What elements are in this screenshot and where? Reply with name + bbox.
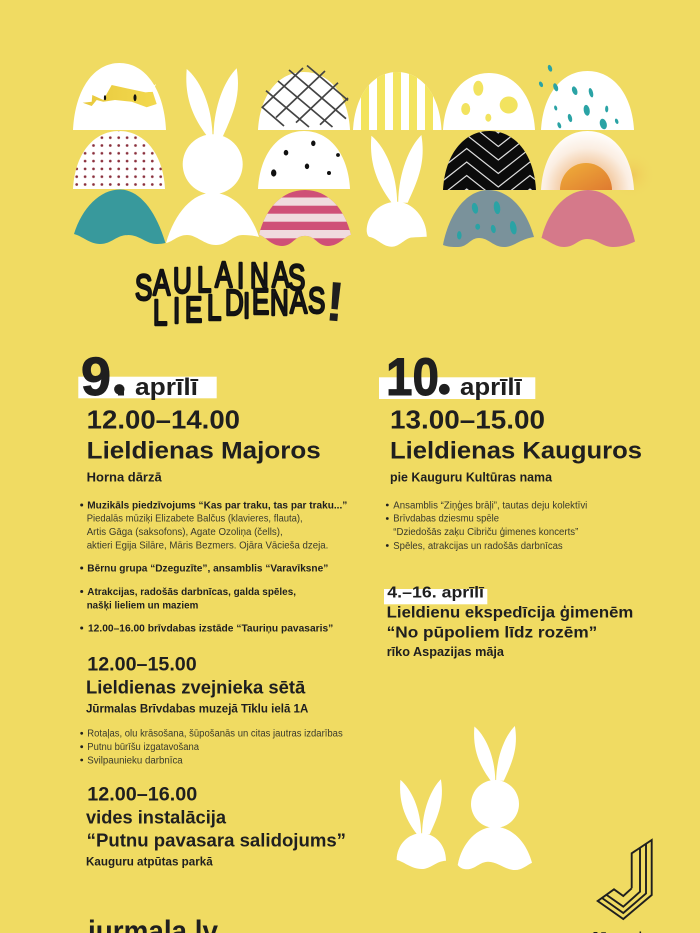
bunny: ears and body [367,135,427,247]
date heading 9. aprīlī [78,347,217,407]
event: Lieldienas zvejnieka sētā: Lieldienas zvejnieka sētā [86,676,306,697]
event: Lieldienas Majoros: 12.00–14.00 [87,406,240,434]
list: Kauguri programme: Spēles, atrakcijas un radošās darbnīcas [393,541,563,552]
egg: teal speckles [538,64,634,130]
event: Putnu pavasara salidojums: Kauguru atpūtas parkā [86,857,213,869]
egg: vertical stripes [353,72,442,130]
event: Lieldienas zvejnieka sētā: 12.00–15.00 [87,654,197,676]
list: zvejnieka sēta programme: Putnu būrīšu izgatavošana [87,742,199,753]
event: Putnu pavasara salidojums: vides instalācija [86,806,227,827]
event: Putnu pavasara salidojums: “Putnu pavasara salidojums” [87,830,346,851]
title: Saulainas Lieldienas [135,255,347,334]
list: zvejnieka sēta programme: Rotaļas, olu krāsošana, šūpošanās un citas jautras izdarības [87,729,343,740]
event: Lieldienu ekspedīcija: 4.–16. aprīlī [387,584,485,601]
infographic poster [73,63,653,933]
egg: black dots [258,131,350,189]
date heading 10. aprīlī: aprīlī [460,374,522,401]
event: Lieldienas Majoros [87,406,321,485]
list: Majoros programme: Artis Gāga (saksofons), Agate Ozoliņa (čells), [87,526,283,538]
event: Lieldienu ekspedīcija [384,584,633,659]
event: Lieldienas Kauguros [390,406,642,485]
list: Majoros programme: aktieri Egija Silāre, Māris Bezmers. Ojāra Vācieša dzeja. [87,539,328,551]
egg: hatching chick [73,63,166,130]
egg: solid pink [542,190,635,247]
column: 9 April [78,347,347,869]
illustration: big bunny [458,726,532,870]
list: Majoros programme: Bērnu grupa “Dzeguzīte”, ansamblis “Varavīksne” [87,563,328,575]
event: Lieldienu ekspedīcija: “No pūpoliem līdz rozēm” [387,625,597,642]
list: Majoros programme: Muzikāls piedzīvojums “Kas par traku, tas par traku...” [87,499,347,511]
event: Lieldienas Majoros: Horna dārzā [87,471,163,485]
date heading 10. aprīlī [379,348,535,407]
event: Putnu pavasara salidojums [86,784,346,869]
list: Majoros programme: 12.00–16.00 brīvdabas izstāde “Tauriņu pavasaris” [88,623,333,635]
logo: Jūrmala J mark [590,840,653,933]
event: Lieldienas Kauguros: 13.00–15.00 [390,406,545,434]
egg: brown polka dots [70,130,168,190]
list: Majoros programme: Atrakcijas, radošās darbnīcas, galda spēles, [87,586,296,598]
event: Lieldienas zvejnieka sētā [86,654,308,715]
event: Lieldienas Kauguros: Lieldienas Kauguros [390,437,642,464]
title: Saulainas Lieldienas: SAULAINAS [135,255,305,308]
list: Majoros programme: našķi lieliem un maziem [87,599,198,611]
list: Majoros programme: Piedalās mūziķi Elizabete Balčus (klavieres, flauta), [87,513,303,525]
list: Kauguri programme: “Dziedošās zaķu Cibriču ģimenes koncerts” [393,525,578,538]
event: Lieldienas zvejnieka sētā: Jūrmalas Brīvdabas muzejā Tīklu ielā 1A [86,703,308,715]
title: Saulainas Lieldienas: ! [323,269,347,334]
event: Lieldienas Kauguros: pie Kauguru Kultūras nama [390,471,553,485]
egg: sunrise [541,131,656,199]
illustration: eggs and bunnies grid [70,60,656,250]
column: 10 April [379,348,642,659]
event: Lieldienu ekspedīcija: rīko Aspazijas māja [387,644,505,659]
egg: yellow spots [443,73,535,130]
list: Kauguri programme: Brīvdabas dziesmu spēle [393,514,499,525]
title: Saulainas Lieldienas: LIELDIENAS [153,281,325,333]
egg: lattice [258,66,350,130]
list: Kauguri programme: Ansamblis “Ziņģes brāļi”, tautas deju kolektīvi [393,498,587,511]
bunny: full figure top row [166,68,259,245]
egg: pink stripes [259,190,351,246]
event: Lieldienas Majoros: Lieldienas Majoros [87,437,321,464]
list: Majoros programme [80,499,347,635]
event: Lieldienu ekspedīcija: Lieldienu ekspedīcija ģimenēm [387,603,633,621]
event: Putnu pavasara salidojums: 12.00–16.00 [87,784,197,806]
egg: black chevrons [443,131,536,190]
date heading 9. aprīlī: aprīlī [135,374,198,401]
egg: teal [74,190,166,244]
illustration: small bunny [397,779,446,869]
list: zvejnieka sēta programme [80,729,343,766]
date heading 10. aprīlī: 10 [386,348,439,407]
list: Kauguri programme [386,498,587,552]
egg: grey with teal spots [443,190,534,247]
date heading 10. aprīlī: . [441,360,451,401]
date heading 9. aprīlī: 9. [81,347,126,407]
list: zvejnieka sēta programme: Svilpaunieku darbnīca [87,755,183,766]
